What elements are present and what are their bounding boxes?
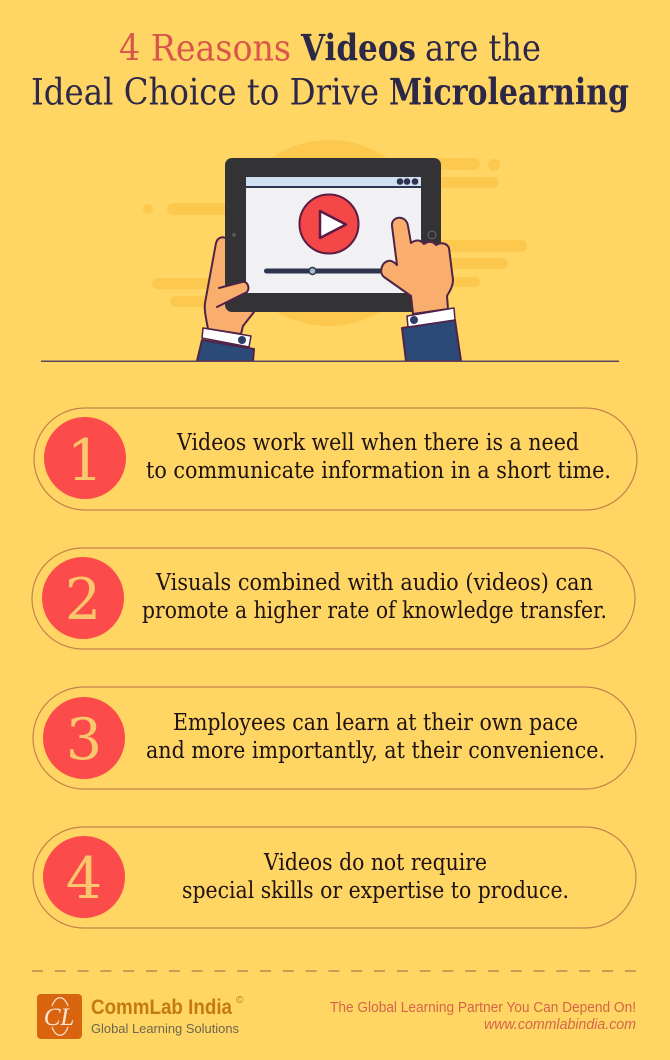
reason 4 text: special skills or expertise to produce.	[182, 876, 569, 904]
number badge 4	[43, 836, 125, 918]
number badge 4: 4	[66, 846, 102, 912]
reason 3 text: Employees can learn at their own pace	[173, 708, 578, 736]
panel: reason 4	[33, 827, 636, 928]
reason 1 text	[146, 428, 611, 484]
reason 3 text	[146, 708, 605, 764]
reason 2 text: promote a higher rate of knowledge transfer.	[142, 596, 607, 624]
number badge 2: 2	[65, 567, 101, 633]
brand name: CommLab India	[91, 996, 232, 1019]
footer: slogan and website: www.commlabindia.com	[484, 1017, 636, 1033]
title: Microlearning	[389, 72, 629, 114]
icon: CL logo	[37, 994, 82, 1039]
footer: CommLab India logo: ©	[236, 995, 244, 1006]
reason 1 text: Videos work well when there is a need	[176, 428, 579, 456]
title: are the	[425, 28, 541, 70]
panel: reason 1	[34, 408, 637, 510]
illustration: hands holding tablet playing a video	[41, 140, 619, 362]
tablet	[225, 158, 441, 312]
number badge 3: 3	[66, 707, 102, 773]
title: 4 Reasons	[119, 28, 291, 70]
video progress bar	[264, 268, 389, 274]
number badge 1	[44, 417, 126, 499]
title	[31, 28, 629, 114]
panel: reason 2	[32, 548, 635, 649]
panel: reason 3	[33, 687, 636, 789]
right cuff and sleeve	[402, 308, 461, 361]
footer: slogan and website	[330, 999, 636, 1033]
reason 2 text: Visuals combined with audio (videos) can	[155, 568, 593, 596]
reason 2 text	[142, 568, 607, 624]
right hand pointing	[381, 218, 453, 314]
number badge 3	[43, 697, 125, 779]
number badge 1: 1	[67, 428, 103, 494]
title: Videos	[300, 28, 416, 70]
icon: CL logo: CL	[44, 1004, 74, 1031]
footer: CommLab India logo	[37, 994, 244, 1039]
footer: slogan and website: The Global Learning Partner You Can Depend On!	[330, 999, 636, 1016]
brand tagline: Global Learning Solutions	[91, 1021, 239, 1036]
number badge 2	[42, 557, 124, 639]
background blob and clouds	[143, 140, 527, 326]
left hand palm	[205, 237, 254, 334]
ground line	[41, 360, 619, 362]
reason 1 text: to communicate information in a short time.	[146, 456, 611, 484]
title: Ideal Choice to Drive	[31, 72, 379, 114]
reason 3 text: and more importantly, at their convenience.	[146, 736, 605, 764]
left cuff and sleeve	[197, 328, 254, 361]
play button	[300, 194, 358, 254]
reason 4 text: Videos do not require	[263, 848, 487, 876]
left thumb	[217, 282, 248, 307]
reason 4 text	[182, 848, 569, 904]
